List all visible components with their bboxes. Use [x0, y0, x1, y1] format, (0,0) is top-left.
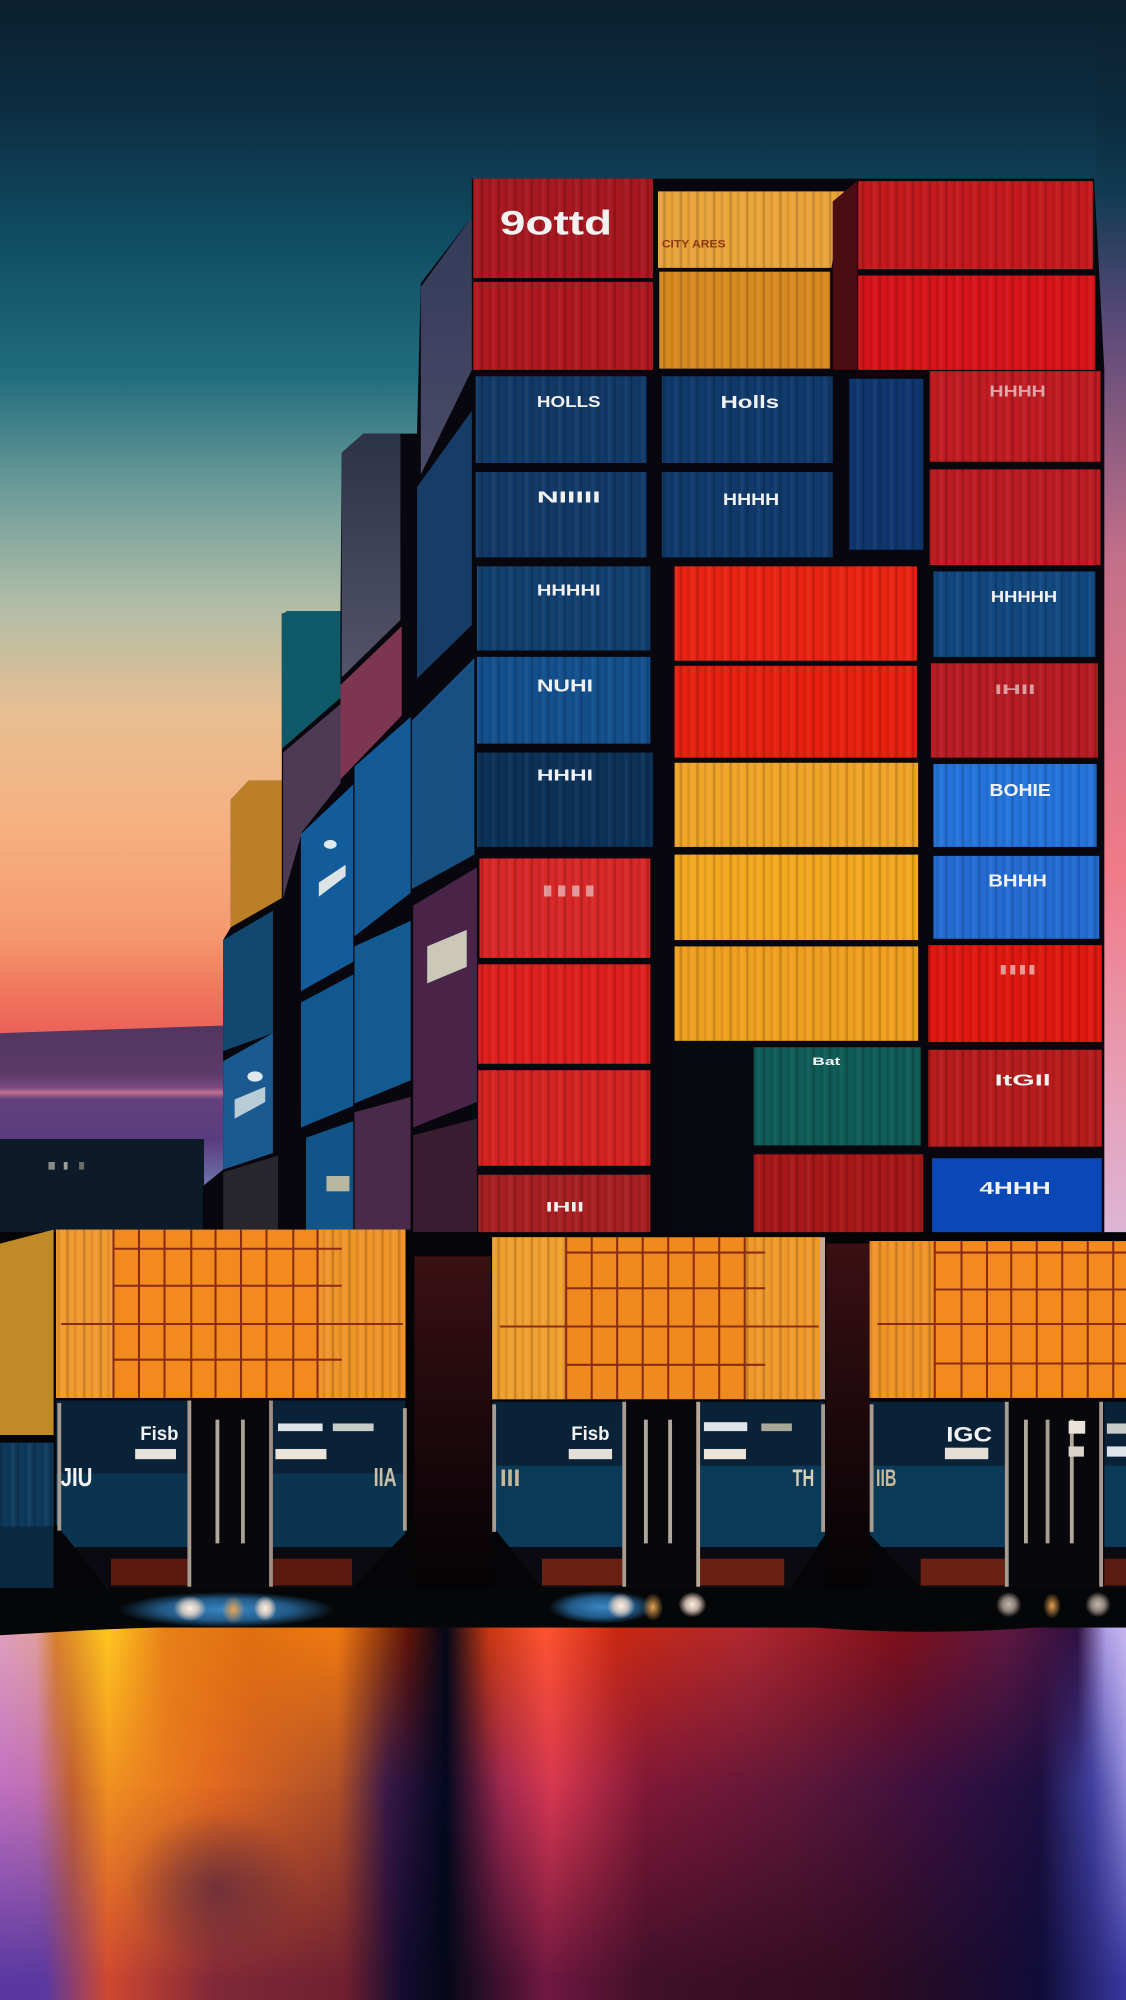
dark, teal and red containers [676, 1043, 752, 1239]
front container center: TH [793, 1465, 814, 1492]
column B containers: HHHH [723, 490, 779, 509]
column A containers: HHHHI [537, 583, 601, 600]
lower door panel [492, 1402, 825, 1466]
door labels: Fisb [140, 1424, 179, 1445]
red container with brand label: 9ottd [500, 205, 612, 243]
right column stack: HHHH [990, 384, 1046, 401]
front container left [0, 1230, 407, 1591]
column C containers: 4HHH [979, 1178, 1051, 1198]
water reflections [0, 1588, 1126, 2000]
blue containers [662, 376, 833, 463]
harbour lights [119, 1592, 335, 1628]
lower door panel [56, 1401, 406, 1473]
blue containers [476, 376, 647, 463]
column C containers [833, 181, 1102, 1237]
front container center [492, 1237, 825, 1588]
column B containers [658, 191, 923, 1239]
column C containers: BOHIE [990, 780, 1051, 800]
red containers [479, 858, 650, 958]
dock edge shadow [0, 1588, 1126, 1635]
column A containers: HHHI [537, 768, 593, 785]
dark band behind the front containers [0, 1232, 1126, 1602]
column C containers: ItGIl [995, 1072, 1051, 1089]
door labels: IGC [946, 1421, 993, 1446]
column A containers: IHII [546, 1199, 584, 1215]
distant dark containers [0, 1139, 204, 1241]
wide red containers [675, 566, 917, 661]
column C containers: IIII [998, 961, 1037, 977]
side blue container [849, 379, 923, 550]
front container left: IIA [374, 1464, 397, 1492]
side labels [319, 865, 346, 897]
column B containers: Bat [812, 1056, 841, 1068]
right column stack [930, 371, 1100, 462]
left receding containers [223, 217, 477, 1256]
front container center: III [500, 1465, 520, 1492]
front container left: JIU [61, 1464, 92, 1492]
blue containers: HOLLS [537, 394, 601, 411]
dark patch in the orange reflection [128, 1811, 306, 1964]
sky gradient [0, 0, 1126, 1036]
blue containers: Holls [720, 392, 779, 412]
right edge glow [1097, 0, 1126, 1244]
front container right: IIB [876, 1465, 896, 1492]
column A containers: NUHI [537, 675, 593, 695]
column A containers [473, 179, 653, 1239]
column C containers: HHHHH [991, 589, 1057, 606]
red containers: IIII [541, 884, 597, 901]
orange top containers [658, 191, 844, 268]
column B containers: CITY ARES [662, 238, 726, 250]
door labels: Fisb [571, 1424, 610, 1445]
red container with brand label [473, 179, 653, 278]
column C containers: IHII [995, 681, 1035, 697]
background dark backing of the stack [203, 179, 1104, 1244]
front container right [870, 1241, 1126, 1588]
top red containers [833, 181, 857, 370]
lower door panel [870, 1402, 1126, 1466]
wide orange containers [675, 763, 918, 847]
column C containers: BHHH [988, 870, 1047, 890]
distant purple clouds [0, 1026, 224, 1189]
column A containers: NIIIII [537, 490, 601, 507]
